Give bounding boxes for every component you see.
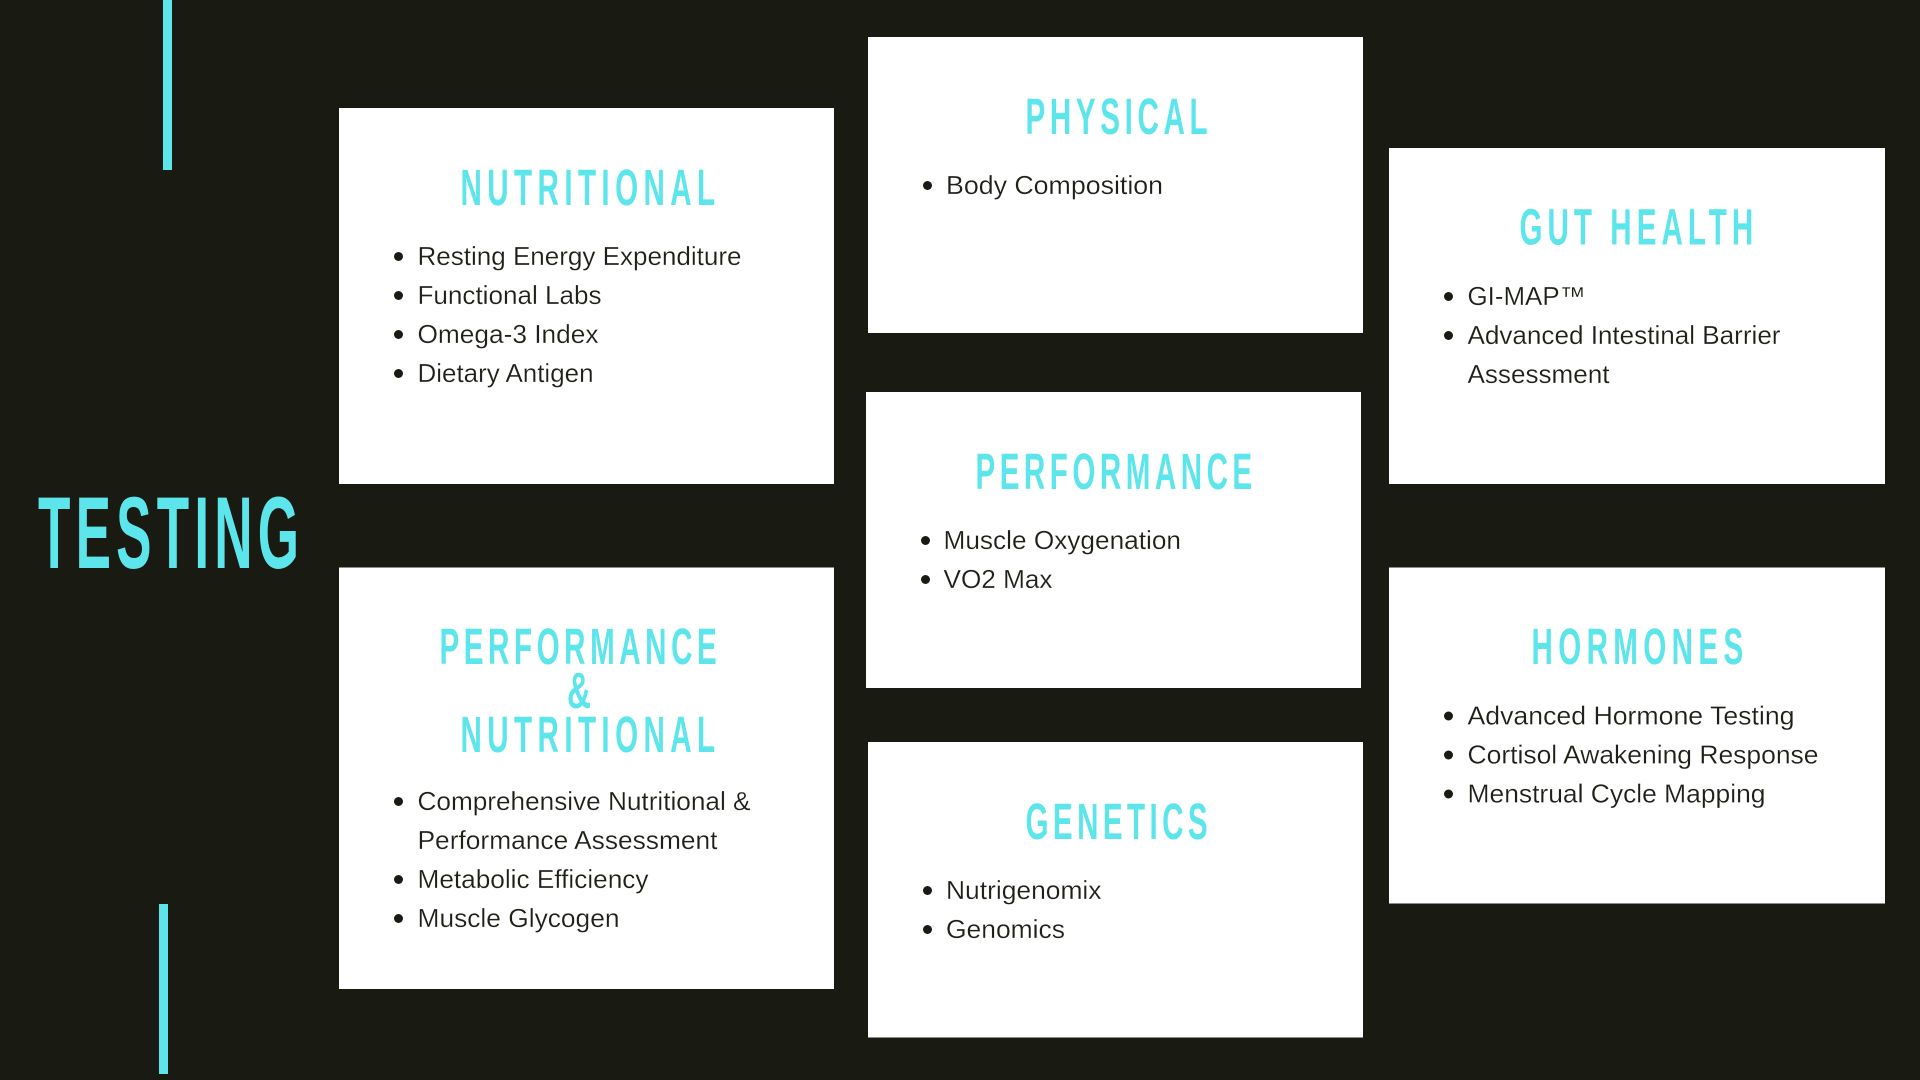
heading: performance: PERFORMANCE (976, 443, 1252, 500)
list: nutritional tests: Dietary Antigen (418, 358, 594, 388)
list: performance and nutritional tests: Performance Assessment (418, 825, 718, 855)
list: genetics tests (923, 875, 1102, 944)
heading: performance and nutritional: & (567, 663, 591, 720)
list: performance and nutritional tests: Comprehensive Nutritional & (418, 786, 750, 816)
list: performance and nutritional tests: Metabolic Efficiency (418, 864, 648, 894)
top accent bar (163, 0, 172, 170)
panel: performance (866, 392, 1361, 688)
list: performance and nutritional tests: Muscle Glycogen (418, 903, 620, 933)
list: nutritional tests: Resting Energy Expenditure (418, 241, 742, 271)
list: genetics tests: Genomics (946, 914, 1065, 944)
heading: physical: PHYSICAL (1026, 88, 1208, 145)
list: performance tests (921, 525, 1181, 594)
list: performance tests: Muscle Oxygenation (944, 525, 1181, 555)
panel: physical (868, 37, 1363, 333)
heading: performance and nutritional (440, 618, 717, 763)
list: nutritional tests: Omega-3 Index (418, 319, 598, 349)
list: gut health tests: GI-MAP™ (1468, 281, 1586, 311)
heading: hormones: HORMONES (1532, 618, 1743, 675)
list: performance tests: VO2 Max (944, 564, 1052, 594)
list: gut health tests (1444, 281, 1781, 389)
list: gut health tests: Advanced Intestinal Barrier (1468, 320, 1781, 350)
heading: genetics: GENETICS (1026, 793, 1208, 850)
list: physical tests: Body Composition (946, 170, 1163, 200)
heading: gut health: GUT HEALTH (1520, 198, 1753, 256)
panel: genetics (868, 742, 1363, 1038)
heading: nutritional: NUTRITIONAL (460, 159, 715, 216)
list: hormone tests: Menstrual Cycle Mapping (1468, 778, 1766, 808)
list: genetics tests: Nutrigenomix (946, 875, 1102, 905)
panel: hormones (1389, 568, 1885, 904)
list: hormone tests: Advanced Hormone Testing (1468, 700, 1794, 730)
list: hormone tests (1444, 700, 1818, 808)
panel: performance and nutritional (339, 568, 834, 989)
list: nutritional tests: Functional Labs (418, 280, 602, 310)
heading: performance and nutritional: NUTRITIONAL (460, 706, 715, 763)
list: hormone tests: Cortisol Awakening Response (1468, 740, 1818, 770)
heading: performance and nutritional: PERFORMANCE (440, 618, 717, 675)
list: nutritional tests (394, 241, 742, 388)
bottom accent bar (159, 904, 168, 1074)
title: TESTING (38, 476, 299, 591)
list: gut health tests: Assessment (1468, 359, 1610, 389)
panel: nutritional (339, 108, 834, 484)
list: performance and nutritional tests (394, 786, 750, 933)
panel: gut health (1389, 148, 1885, 484)
